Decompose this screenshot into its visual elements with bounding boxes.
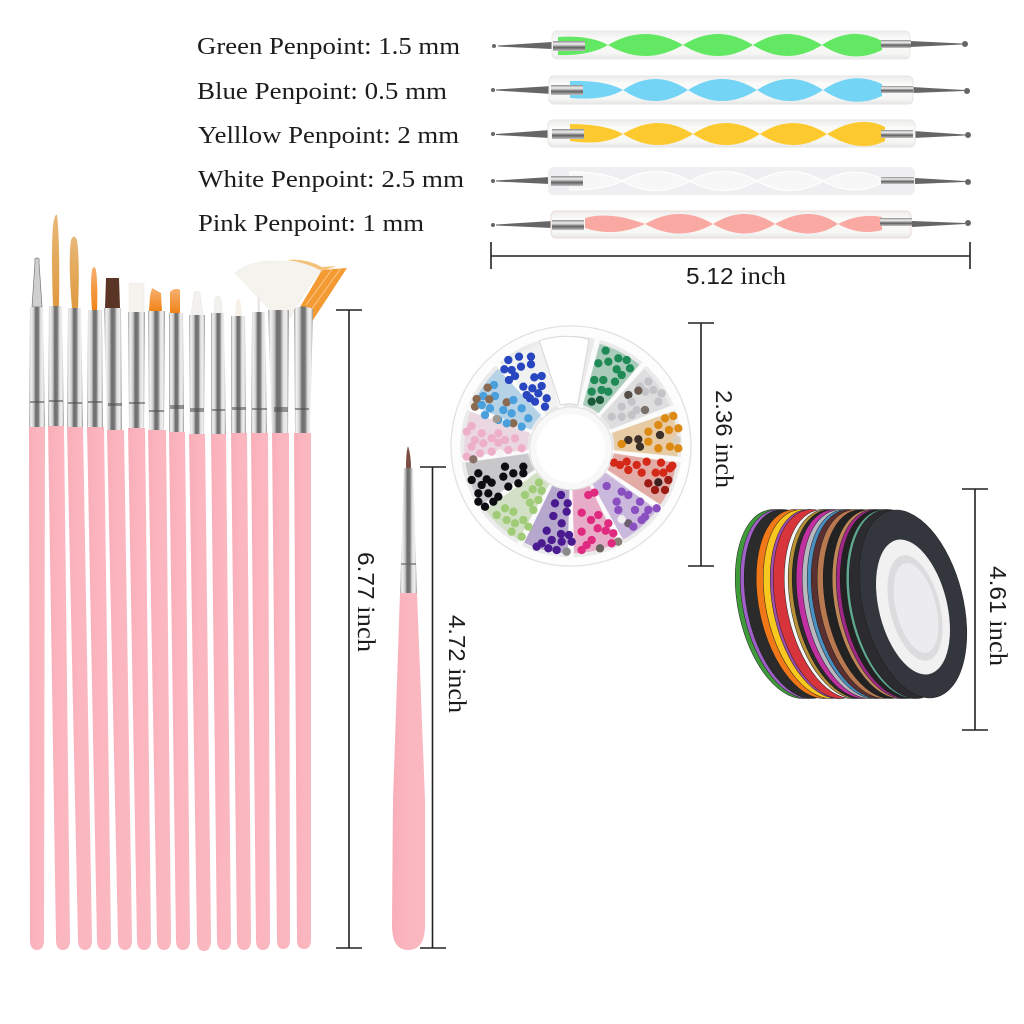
brush set: fourteen pink brushes — [29, 215, 347, 951]
dimension: liner brush length 4.72 inch: 4.72 inch — [443, 615, 470, 714]
gems: aqua and brown — [471, 381, 532, 431]
spokes — [458, 337, 684, 560]
fan brush: orange — [287, 260, 347, 320]
center hub — [530, 407, 612, 490]
gems: silver — [607, 377, 666, 421]
blue penpoint label: Blue Penpoint: 0.5 mm — [197, 79, 447, 105]
gems: lilac — [602, 482, 661, 531]
pink handles — [29, 426, 311, 951]
front spool ring — [863, 532, 963, 682]
front spool interior — [878, 550, 952, 666]
tape stack — [719, 499, 985, 709]
dimension: liner brush length 4.72 inch — [420, 467, 470, 948]
dimension: pens width 5.12 inch: 5.12 inch — [686, 263, 787, 290]
gems: purple — [532, 491, 576, 556]
gems: pink — [462, 422, 526, 463]
gems: light green — [492, 478, 546, 541]
dimension: brush set length 6.77 inch — [336, 310, 379, 948]
gems: black — [467, 462, 527, 511]
ferrule bands — [30, 400, 309, 412]
dotting pen: green — [492, 31, 968, 59]
striping tape rolls — [719, 499, 985, 709]
compartment colour tints — [462, 342, 680, 556]
yellow penpoint label: Yelllow Penpoint: 2 mm — [198, 123, 459, 149]
dimension: wheel diameter 2.36 inch — [688, 323, 737, 566]
white penpoint label: White Penpoint: 2.5 mm — [198, 167, 464, 193]
single liner brush — [392, 446, 425, 950]
dotting pen: blue — [491, 76, 970, 104]
fan brush: white — [235, 261, 322, 318]
dotting pen: white — [491, 167, 971, 195]
dimension: wheel diameter 2.36 inch: 2.36 inch — [710, 390, 737, 489]
dotting pen: pink — [491, 211, 971, 238]
rhinestone wheel — [451, 326, 691, 566]
gems: red — [610, 457, 676, 494]
gems: green — [587, 346, 634, 406]
dimension: tape height 4.61 inch: 4.61 inch — [984, 566, 1011, 667]
dimension: brush set length 6.77 inch: 6.77 inch — [352, 552, 379, 653]
wheel body — [451, 326, 691, 566]
gems: fuchsia — [577, 488, 622, 554]
dimension: tape height 4.61 inch — [962, 489, 1011, 730]
brush tips — [32, 215, 347, 320]
title: green penpoint label: Green Penpoint: 1.5 mm — [197, 34, 460, 60]
dotting pen: yellow — [491, 120, 971, 147]
gems: amber — [617, 412, 682, 452]
empty compartment — [539, 336, 589, 405]
ferrules — [29, 306, 313, 434]
dimension: pens width 5.12 inch — [491, 242, 970, 290]
gems: blue — [500, 352, 551, 411]
pink penpoint label: Pink Penpoint: 1 mm — [198, 211, 424, 237]
